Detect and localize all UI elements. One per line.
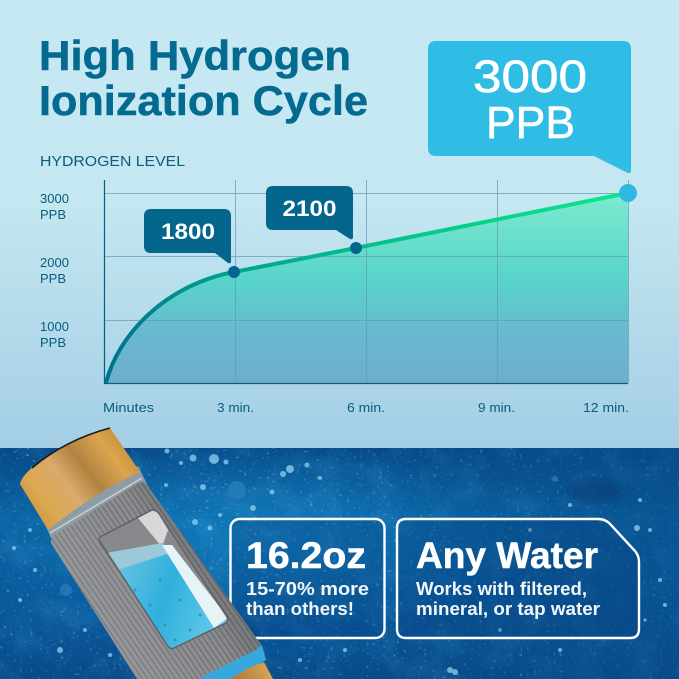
y axis labels: 3000 xyxy=(40,191,69,206)
chart xyxy=(40,41,637,415)
callout 2100: 2100 xyxy=(282,196,336,221)
axes xyxy=(104,180,628,384)
silicone sleeve xyxy=(51,482,262,679)
x axis labels: Minutes xyxy=(103,400,155,415)
marker 1800 xyxy=(228,266,240,278)
y axis labels: 1000 xyxy=(40,319,69,334)
title: High Hydrogen xyxy=(39,32,351,79)
water in window xyxy=(106,543,230,652)
feature box: 16.2oz: than others! xyxy=(246,598,354,619)
bottle neck glass xyxy=(44,466,148,545)
feature box: 16.2oz xyxy=(230,519,384,638)
y axis labels: PPB xyxy=(40,335,66,350)
neck shine xyxy=(50,478,142,533)
y axis labels: PPB xyxy=(40,271,66,286)
marker 2100 xyxy=(350,242,362,254)
callout 3000 PPB xyxy=(428,41,631,173)
grid xyxy=(104,180,628,383)
marker 3000 xyxy=(619,184,637,202)
window xyxy=(100,510,227,648)
callout 3000 PPB: 3000 xyxy=(473,51,587,102)
feature box: any water: mineral, or tap water xyxy=(416,598,600,619)
bubbles strip xyxy=(162,545,228,628)
title: Ionization Cycle xyxy=(39,77,368,124)
callout 3000 PPB: PPB xyxy=(486,97,575,148)
title xyxy=(39,32,368,124)
window frame xyxy=(99,510,228,649)
callout 1800 xyxy=(144,209,231,263)
feature box: any water: Works with filtered, xyxy=(416,578,587,599)
gold cap xyxy=(20,428,140,530)
bottle xyxy=(20,428,273,679)
feature box: any water xyxy=(397,519,639,638)
feature box: 16.2oz: 16.2oz xyxy=(246,535,366,576)
callout 2100 xyxy=(266,186,353,239)
y axis labels xyxy=(40,191,69,350)
underwater band xyxy=(0,448,679,679)
x axis labels xyxy=(103,400,629,415)
chart title: hydrogen level: HYDROGEN LEVEL xyxy=(40,154,185,170)
sleeve shading xyxy=(51,482,262,679)
feature box: 16.2oz: 15-70% more xyxy=(246,578,369,599)
highlight strip xyxy=(138,510,168,544)
bottom glass xyxy=(198,645,266,679)
bottom gold cap xyxy=(230,662,273,679)
y axis labels: PPB xyxy=(40,207,66,222)
x axis labels: 12 min. xyxy=(583,400,629,415)
y axis labels: 2000 xyxy=(40,255,69,270)
upper background xyxy=(0,0,679,448)
bubbles in water xyxy=(134,578,202,642)
feature box: any water: Any Water xyxy=(416,535,598,576)
callout 1800: 1800 xyxy=(161,219,215,244)
cap top edge xyxy=(32,428,110,468)
area under curve xyxy=(105,193,628,383)
hydrogen curve xyxy=(106,193,628,383)
water surface xyxy=(107,543,170,570)
x axis labels: 6 min. xyxy=(347,400,385,415)
x axis labels: 9 min. xyxy=(478,400,515,415)
x axis labels: 3 min. xyxy=(217,400,254,415)
